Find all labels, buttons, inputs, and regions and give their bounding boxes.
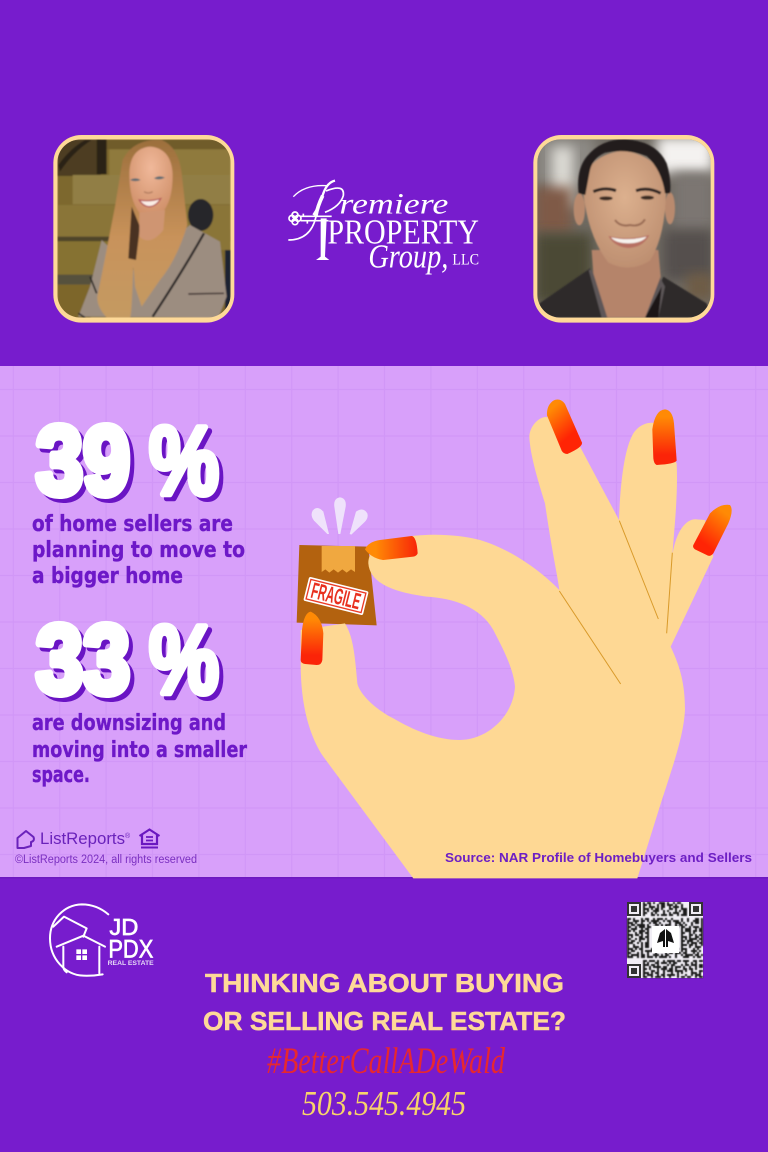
icon: fragile box [297, 545, 377, 625]
stat: 39 percent: % [153, 410, 223, 519]
brand: ListReports logo [18, 830, 160, 848]
icon: middle fingernail [652, 409, 677, 465]
sweater [78, 225, 227, 318]
hair [97, 140, 187, 318]
logo: Premiere Property Group: remiere [339, 188, 448, 220]
illustration: hand pinching a tiny box [297, 399, 732, 878]
label: fragile sticker: FRAGILE [309, 577, 363, 614]
brand: ListReports logo: ListReports [40, 830, 125, 848]
logo: JD PDX Real Estate: REAL ESTATE [108, 960, 154, 967]
logo: Premiere Property Group: PROPERTY [327, 212, 479, 251]
logo: Premiere Property Group: LLC [452, 251, 479, 268]
hair [578, 139, 670, 195]
photo: woman agent portrait [53, 135, 234, 323]
logo key icon [289, 212, 332, 225]
icon: ring fingernail [693, 505, 732, 556]
stat: 33 percent [36, 605, 223, 718]
stat: 33 percent: 33 [40, 609, 134, 718]
stat: 39 percent: % [149, 406, 219, 515]
icon: ListReports house mark [18, 831, 34, 848]
text: hashtag: #BetterCallADeWald [267, 1041, 505, 1082]
icon: sparkle marks [312, 497, 368, 535]
call to action heading [203, 968, 566, 1036]
logo: Premiere Property Group [288, 181, 479, 276]
panel: lavender statistics panel [0, 366, 768, 878]
hand shape [301, 417, 713, 878]
text: phone number: 503.545.4945 [302, 1084, 466, 1123]
logo swashes [288, 181, 343, 240]
face [129, 147, 173, 217]
text: 33 percent description: are downsizing and [32, 711, 226, 736]
stat: 33 percent: % [149, 605, 219, 714]
text: 39 percent description: of home sellers are [32, 512, 233, 537]
text: 33 percent description: space. [32, 763, 90, 788]
logo: Premiere Property Group: Group, [368, 239, 448, 276]
call to action heading: OR SELLING REAL ESTATE? [203, 1006, 566, 1036]
brand: ListReports logo: ® [125, 832, 131, 840]
stat: 39 percent [36, 406, 223, 519]
photo: man agent portrait [533, 135, 714, 323]
stat: 39 percent: 39 [40, 410, 134, 519]
text: 39 percent description: planning to move to [32, 538, 245, 563]
ears [574, 193, 585, 225]
logo tall stem [316, 218, 329, 260]
icon: house in circle [50, 904, 108, 976]
finger creases [559, 521, 672, 684]
text: 39 percent description: a bigger home [32, 564, 183, 589]
icon: equal housing opportunity [140, 830, 160, 848]
chest [132, 266, 134, 268]
QR code [627, 902, 703, 978]
logo: JD PDX Real Estate: JD [109, 914, 138, 940]
text: ListReports copyright: ©ListReports 2024, all rights reserved [15, 854, 197, 866]
neck shadow [125, 203, 138, 263]
text: 33 percent description: moving into a smaller [32, 738, 247, 763]
icon: index fingernail [547, 399, 582, 454]
stat: 33 percent: % [153, 609, 223, 718]
stat: 39 percent: 39 [36, 406, 130, 515]
icon: upper pinching nail [365, 536, 418, 560]
neck [592, 250, 661, 318]
text: 39 percent description [32, 512, 245, 589]
call to action heading: THINKING ABOUT BUYING [205, 968, 564, 998]
text: 33 percent description [32, 711, 247, 788]
QR finder squares [628, 903, 702, 977]
face [583, 151, 666, 268]
QR centre mark [652, 926, 679, 953]
stat: 33 percent: 33 [36, 605, 130, 714]
text: source citation: Source: NAR Profile of Homebuyers and Sellers [445, 850, 752, 865]
jacket [539, 268, 712, 318]
logo: JD PDX Real Estate [50, 904, 154, 976]
icon: lower pinching nail [301, 612, 323, 665]
logo: JD PDX Real Estate: PDX [108, 936, 153, 964]
